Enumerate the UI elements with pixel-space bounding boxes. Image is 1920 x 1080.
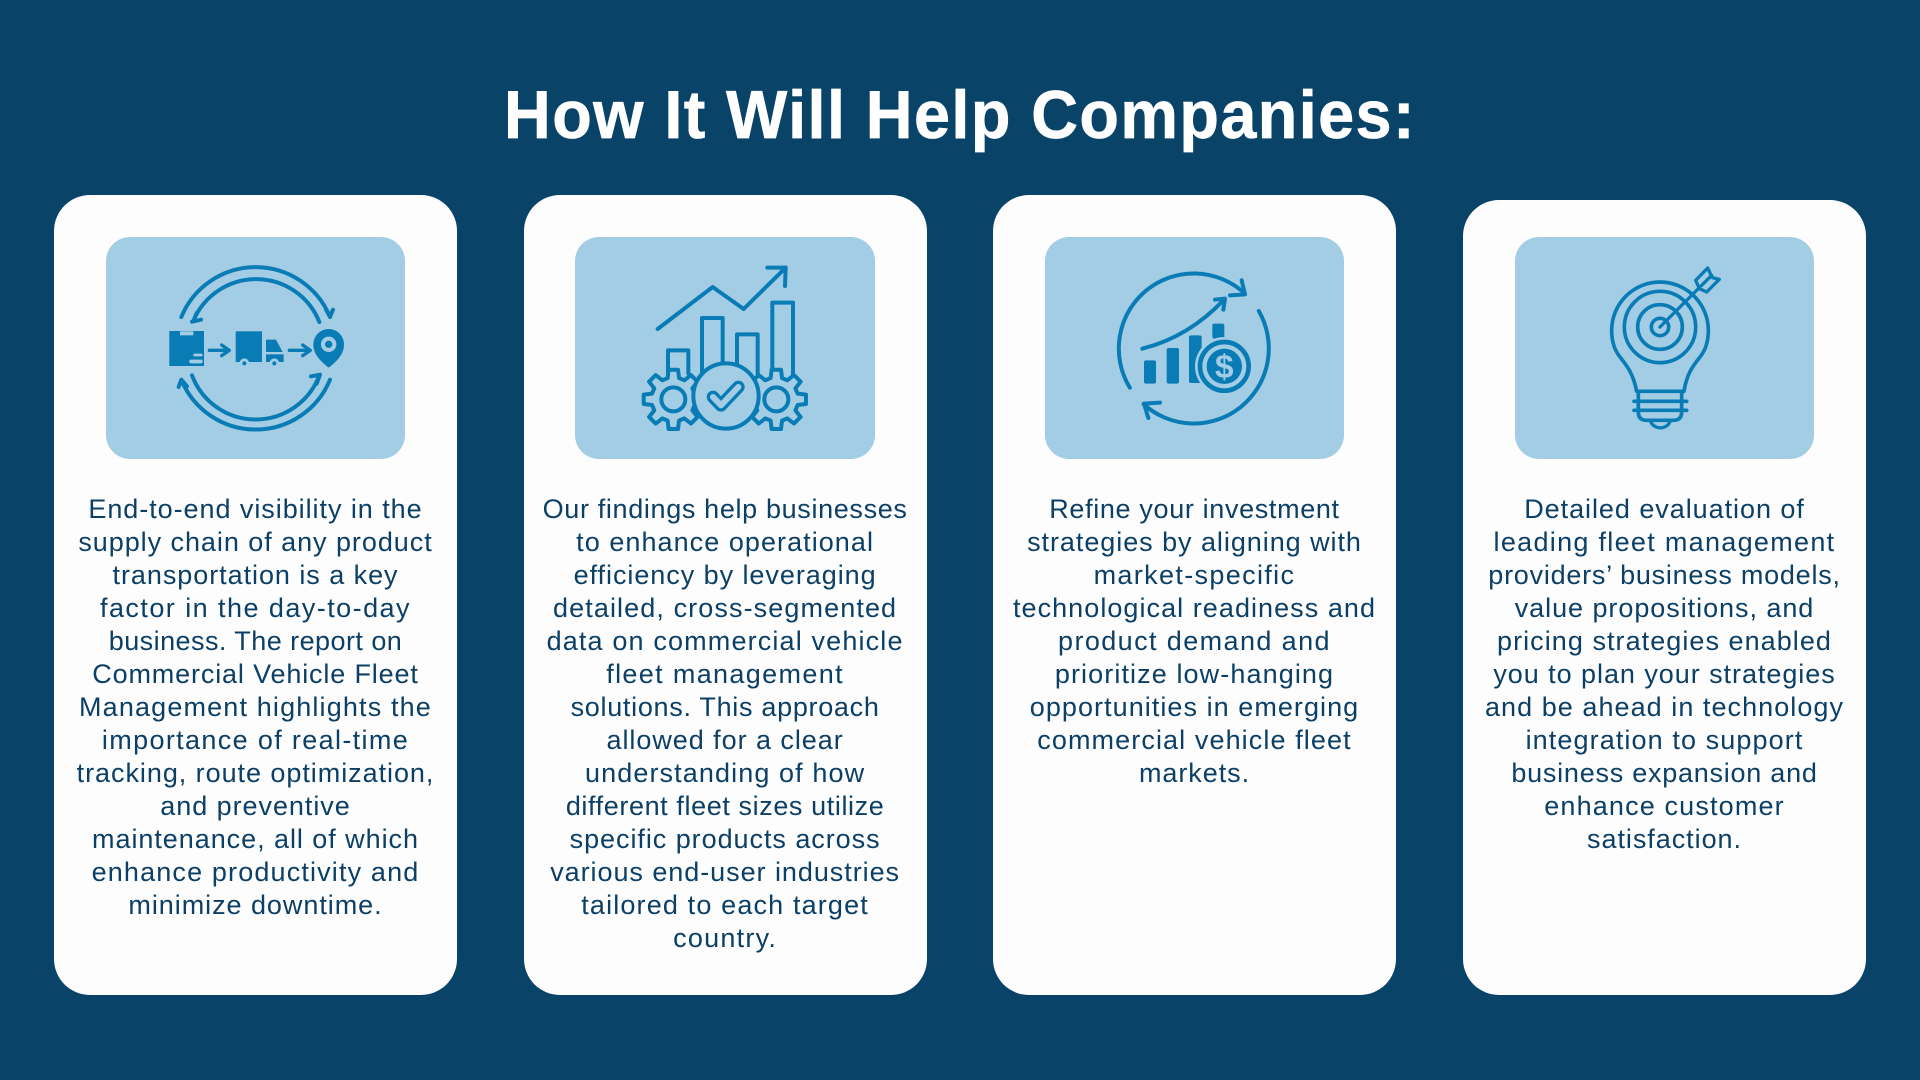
icon tile: operational efficiency — [575, 237, 875, 459]
text: operational efficiency: efficiency by leveraging — [574, 560, 877, 590]
text: provider evaluation: providers’ business models, — [1488, 560, 1841, 590]
text: end-to-end visibility: Commercial Vehicle Fleet — [92, 659, 419, 689]
text: operational efficiency: data on commercial vehicle — [547, 626, 904, 656]
text: end-to-end visibility: business. The report on — [109, 626, 402, 656]
text: provider evaluation: enhance customer — [1544, 791, 1785, 821]
text: investment strategies: commercial vehicle fleet — [1037, 725, 1352, 755]
text: provider evaluation: Detailed evaluation of — [1524, 494, 1805, 524]
text: investment strategies — [1013, 494, 1376, 788]
text: operational efficiency: various end-user industries — [550, 857, 900, 887]
text: provider evaluation — [1485, 494, 1844, 854]
icon tile: provider evaluation — [1514, 237, 1814, 459]
text: investment strategies: strategies by aligning with — [1027, 527, 1362, 557]
text: end-to-end visibility: maintenance, all of which — [92, 824, 419, 854]
text: end-to-end visibility — [77, 494, 434, 920]
text: end-to-end visibility: tracking, route optimization, — [77, 758, 434, 788]
text: operational efficiency: fleet management — [606, 659, 844, 689]
text: provider evaluation: pricing strategies enabled — [1497, 626, 1832, 656]
text: operational efficiency: different fleet sizes utilize — [566, 791, 884, 821]
text: end-to-end visibility: minimize downtime. — [128, 890, 383, 920]
text: investment strategies: product demand and — [1058, 626, 1331, 656]
text: operational efficiency: detailed, cross-segmented — [553, 593, 897, 623]
icon: light bulb with target — [1610, 266, 1721, 430]
panel: provider evaluation — [1463, 200, 1866, 995]
text: provider evaluation: business expansion and — [1511, 758, 1818, 788]
text: investment strategies: opportunities in emerging — [1030, 692, 1359, 722]
text: provider evaluation: leading fleet management — [1494, 527, 1835, 557]
text: provider evaluation: you to plan your strategies — [1493, 659, 1836, 689]
text: operational efficiency: Our findings help businesses — [543, 494, 908, 524]
panel: investment strategies — [993, 195, 1396, 995]
text: end-to-end visibility: and preventive — [160, 791, 351, 821]
text: investment strategies: markets. — [1139, 758, 1250, 788]
text: investment strategies: Refine your investment — [1049, 494, 1340, 524]
text: operational efficiency: understanding of how — [585, 758, 865, 788]
text: operational efficiency: to enhance operational — [576, 527, 874, 557]
text: provider evaluation: satisfaction. — [1587, 824, 1742, 854]
text: end-to-end visibility: supply chain of any product — [78, 527, 433, 557]
icon: growth chart with gears and check — [642, 266, 808, 431]
text: operational efficiency — [543, 494, 908, 953]
text: end-to-end visibility: Management highlights the — [79, 692, 432, 722]
icon: investment growth cycle: $ — [1215, 349, 1234, 386]
icon tile: investment strategies — [1044, 237, 1344, 459]
panel: end-to-end visibility — [54, 195, 457, 995]
text: operational efficiency: country. — [673, 923, 777, 953]
text: provider evaluation: integration to support — [1526, 725, 1803, 755]
text: end-to-end visibility: enhance productivity and — [92, 857, 419, 887]
text: operational efficiency: allowed for a clear — [606, 725, 844, 755]
icon: investment growth cycle — [1116, 272, 1271, 426]
text: investment strategies: technological readiness and — [1013, 593, 1376, 623]
text: end-to-end visibility: factor in the day-to-day — [100, 593, 411, 623]
text: end-to-end visibility: transportation is a key — [112, 560, 398, 590]
text: investment strategies: prioritize low-hanging — [1055, 659, 1334, 689]
text: provider evaluation: value propositions, and — [1515, 593, 1814, 623]
icon: supply chain cycle — [169, 265, 344, 432]
text: investment strategies: market-specific — [1094, 560, 1295, 590]
text: end-to-end visibility: End-to-end visibility in the — [88, 494, 423, 524]
text: end-to-end visibility: importance of real-time — [102, 725, 409, 755]
panel: operational efficiency — [524, 195, 927, 995]
icon tile: supply chain — [106, 237, 405, 459]
text: provider evaluation: and be ahead in technology — [1485, 692, 1844, 722]
text: operational efficiency: solutions. This approach — [571, 692, 880, 722]
text: operational efficiency: tailored to each target — [581, 890, 869, 920]
title: How It Will Help Companies: — [504, 77, 1416, 153]
text: operational efficiency: specific products across — [570, 824, 881, 854]
